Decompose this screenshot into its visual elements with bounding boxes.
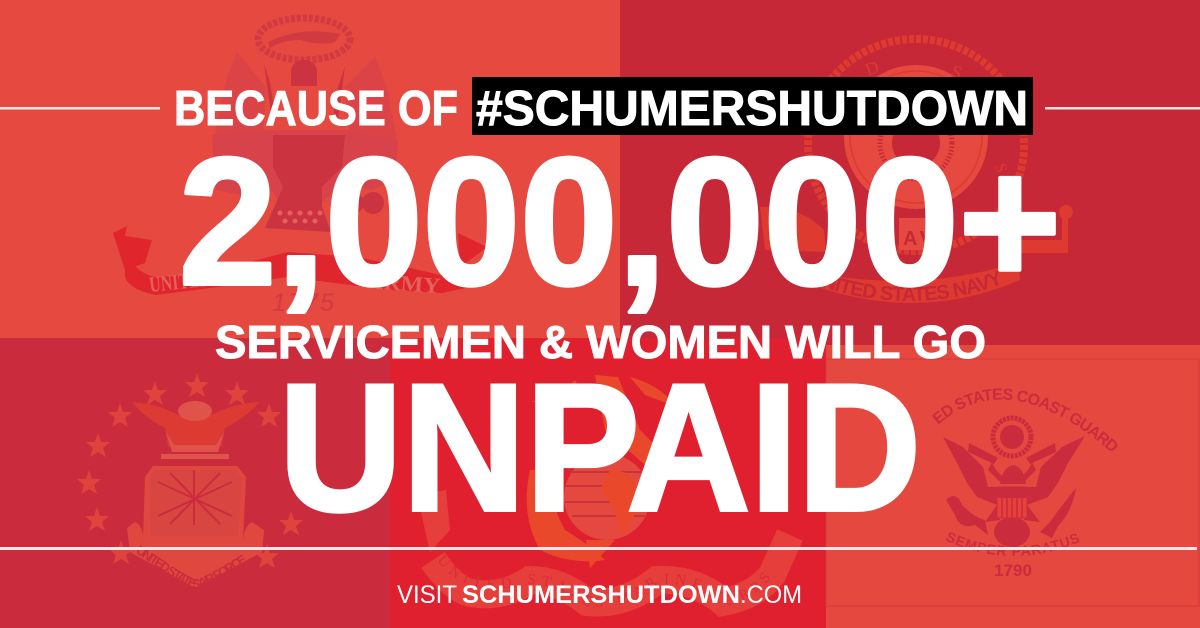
icon: navy emblem: D (863, 57, 882, 80)
heading: because of: BECAUSE OF (174, 82, 458, 136)
divider: header left (0, 107, 160, 110)
icon: navy emblem (760, 35, 1073, 303)
headline: unpaid: UNPAID (279, 347, 921, 549)
footer call to action: .COM (740, 581, 802, 609)
icon: marine corps emblem (421, 375, 802, 617)
footer call to action (397, 581, 802, 609)
icon: navy emblem: UNITED STATES NAVY (822, 270, 998, 301)
panel: coast guard background (826, 345, 1200, 628)
panel: air force background (0, 338, 390, 628)
subheading: SERVICEMEN & WOMEN WILL GO (215, 316, 986, 368)
icon: coast guard emblem: 1790 (994, 561, 1032, 580)
icon: navy emblem: AV (903, 228, 934, 250)
icon: coast guard emblem: SEMPER PARATUS (946, 532, 1080, 556)
icon: army emblem (113, 18, 487, 317)
panel: navy background (620, 0, 1200, 345)
divider: footer line (0, 547, 1197, 550)
icon: army emblem: 1775 (272, 289, 334, 317)
icon: coast guard emblem: ED STATES COAST GUARD (932, 388, 1117, 451)
icon: army emblem: UNITED (148, 266, 212, 297)
footer call to action: VISIT (397, 581, 457, 609)
icon: air force emblem: UNITED STATES AIR FORCE (137, 546, 244, 588)
icon: coast guard emblem (932, 388, 1117, 580)
icon: army emblem: ARMY (366, 268, 441, 298)
footer call to action: SCHUMERSHUTDOWN (462, 581, 740, 609)
panel: army background (0, 0, 620, 338)
hashtag highlight: #SCHUMERSHUTDOWN (476, 82, 1028, 136)
panel: marine corps background (390, 338, 826, 628)
icon: marine corps emblem: UNITED STATES MARINE CORPS (439, 554, 770, 608)
divider: header right (1045, 107, 1200, 110)
icon: navy emblem: S (949, 61, 965, 83)
icon: navy emblem: S (991, 162, 1010, 175)
big number: 2,000,000+ (179, 121, 1061, 323)
icon: air force emblem (77, 374, 303, 588)
